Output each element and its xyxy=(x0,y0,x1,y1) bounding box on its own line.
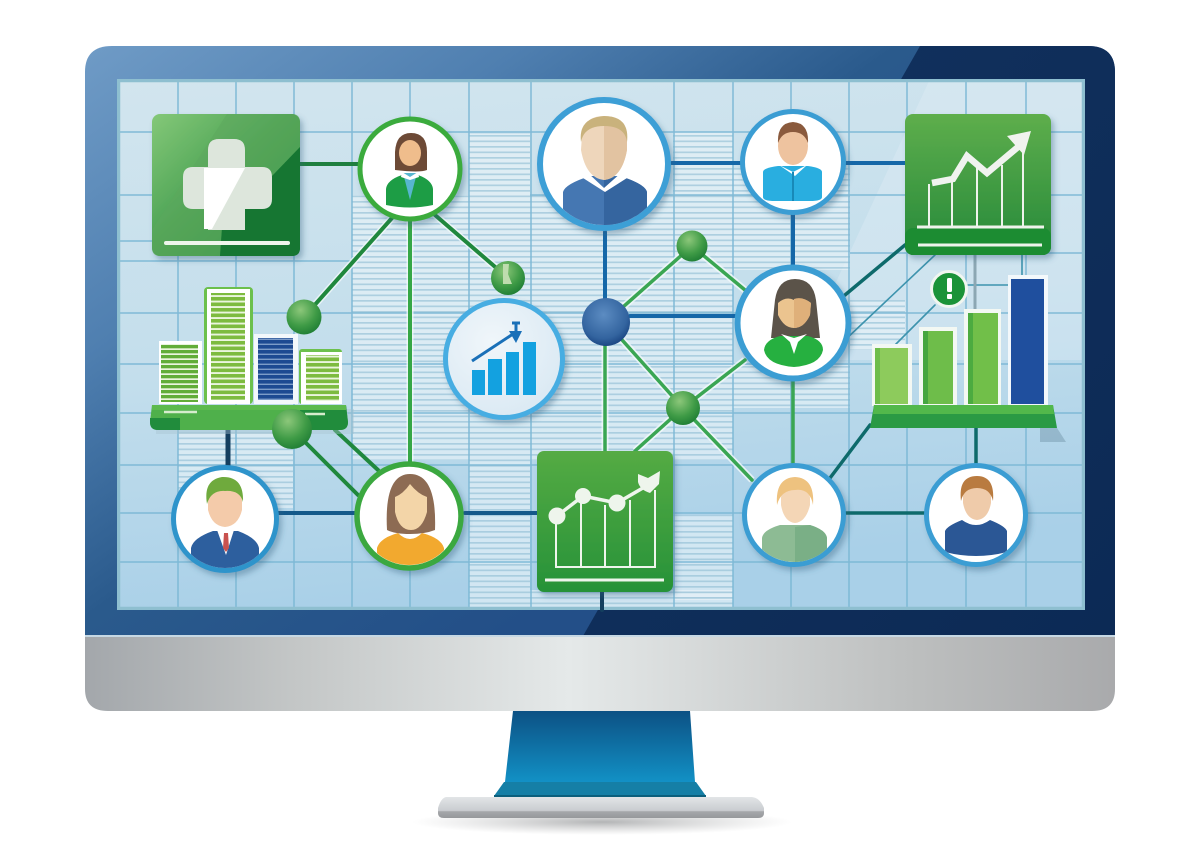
person: woman with brown hair and orange top xyxy=(357,464,461,570)
monitor base foot xyxy=(438,797,764,818)
monitor chin xyxy=(85,630,1115,711)
node: green dot lower center xyxy=(666,391,700,425)
illustration: monitor with people and data network xyxy=(85,46,1115,833)
grid lines xyxy=(120,80,1085,607)
person: man in light blue shirt xyxy=(742,112,844,212)
node: green dot on shelf xyxy=(272,409,312,449)
person: blond man in sage shirt xyxy=(744,466,844,566)
icon: cross xyxy=(183,139,272,230)
icon: alert badge xyxy=(932,272,966,306)
panel: line chart card xyxy=(537,451,673,592)
icon: trend arrow xyxy=(932,147,1018,183)
node: blue hub xyxy=(582,298,630,346)
node: green dot left xyxy=(286,300,322,334)
bar chart: striped bars on shelf xyxy=(150,287,354,434)
screen xyxy=(117,79,1085,610)
panel: medical cross card xyxy=(152,114,300,256)
shelf xyxy=(870,405,1057,428)
floor shadow xyxy=(412,809,792,835)
person: man with green hair in suit xyxy=(174,468,276,570)
person: man in navy t-shirt xyxy=(926,466,1026,564)
person: woman in green jacket xyxy=(360,119,460,219)
icon: arrow tip xyxy=(638,471,660,493)
monitor bezel xyxy=(85,46,1115,637)
hatched data background xyxy=(178,131,905,610)
node: green dot upper center xyxy=(676,230,708,262)
icon: analytics circle xyxy=(446,300,562,418)
bar chart: green and blue bars on shelf xyxy=(870,272,1066,442)
connector halos xyxy=(304,215,752,480)
network connectors xyxy=(228,163,1022,610)
shelf xyxy=(150,405,348,430)
monitor stand xyxy=(494,711,706,798)
panel: growth chart card xyxy=(905,114,1051,255)
node: green dot with mark xyxy=(491,261,525,295)
person: woman with long dark hair xyxy=(738,268,848,378)
person: blond man in blue sweater xyxy=(540,100,668,240)
